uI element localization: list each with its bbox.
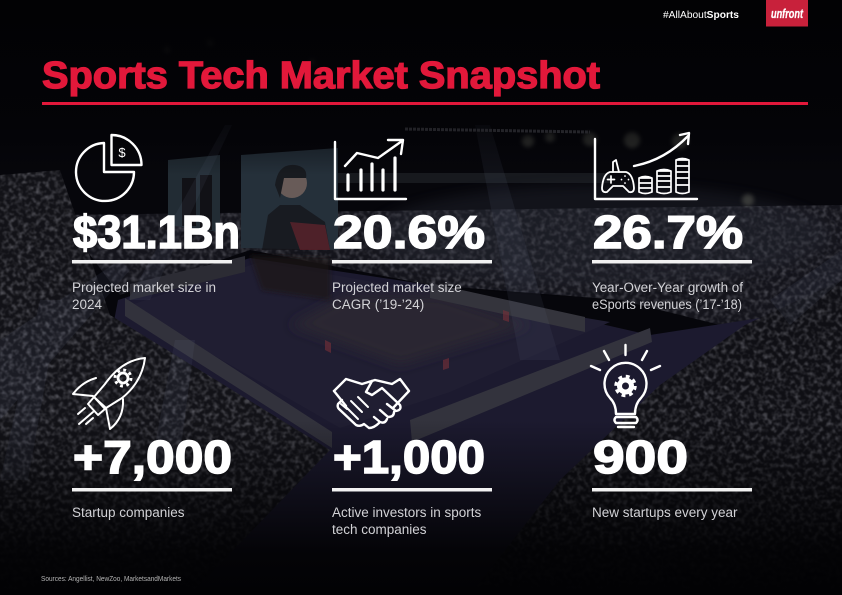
icon: handshake [334,379,409,428]
title: Sports Tech Market Snapshot [42,55,600,97]
description: Projected market size [332,280,462,295]
upper stands [76,205,842,324]
panel: investors [332,379,492,537]
panel: eSports growth [592,133,752,312]
icon: light bulb with gear [591,345,660,427]
side crowds [0,170,330,515]
hashtag: #AllAboutSports [663,10,739,21]
panel: new startups [591,345,752,520]
value: 26.7% [593,206,743,258]
icon: pie chart with dollar: $ [118,145,126,160]
panel: market size [72,135,240,312]
stadium lights [164,40,754,206]
description: CAGR (’19-’24) [332,297,424,312]
value: +1,000 [333,431,485,483]
underline [332,488,492,492]
icon: controller and coin stacks [595,133,697,199]
logo: Infront [766,0,808,26]
description: New startups every year [592,505,738,520]
underline [72,260,232,264]
title rule [42,102,808,105]
light beams [0,125,842,480]
upper glow [370,185,830,285]
stage block [250,255,330,300]
value: +7,000 [73,431,232,483]
description: Startup companies [72,505,185,520]
description: Active investors in sports [332,505,482,520]
description: Year-Over-Year growth of [592,280,743,295]
darkening overlays [0,0,842,175]
value: 900 [593,431,688,483]
description: tech companies [332,522,427,537]
arena floor [100,258,760,595]
logo: Infront: unfront [771,6,803,21]
underline [592,488,752,492]
background: arena photograph [0,128,842,538]
description: Projected market size in [72,280,216,295]
panel: CAGR [332,140,492,312]
barriers [125,298,332,448]
sources: Sources: Angellist, NewZoo, MarketsandMarkets [41,576,181,583]
screens [168,155,220,232]
panel: startups [72,358,232,520]
underline [592,260,752,264]
underline [332,260,492,264]
description: 2024 [72,297,103,312]
description: eSports revenues (’17-’18) [592,297,742,312]
icon: rocket [73,358,145,429]
player on screen [262,165,330,250]
icon: pie chart with dollar [76,135,142,201]
value: 20.6% [333,206,485,258]
value: $31.1Bn [73,206,240,258]
underline [72,488,232,492]
icon: bar chart with arrow [335,140,406,199]
